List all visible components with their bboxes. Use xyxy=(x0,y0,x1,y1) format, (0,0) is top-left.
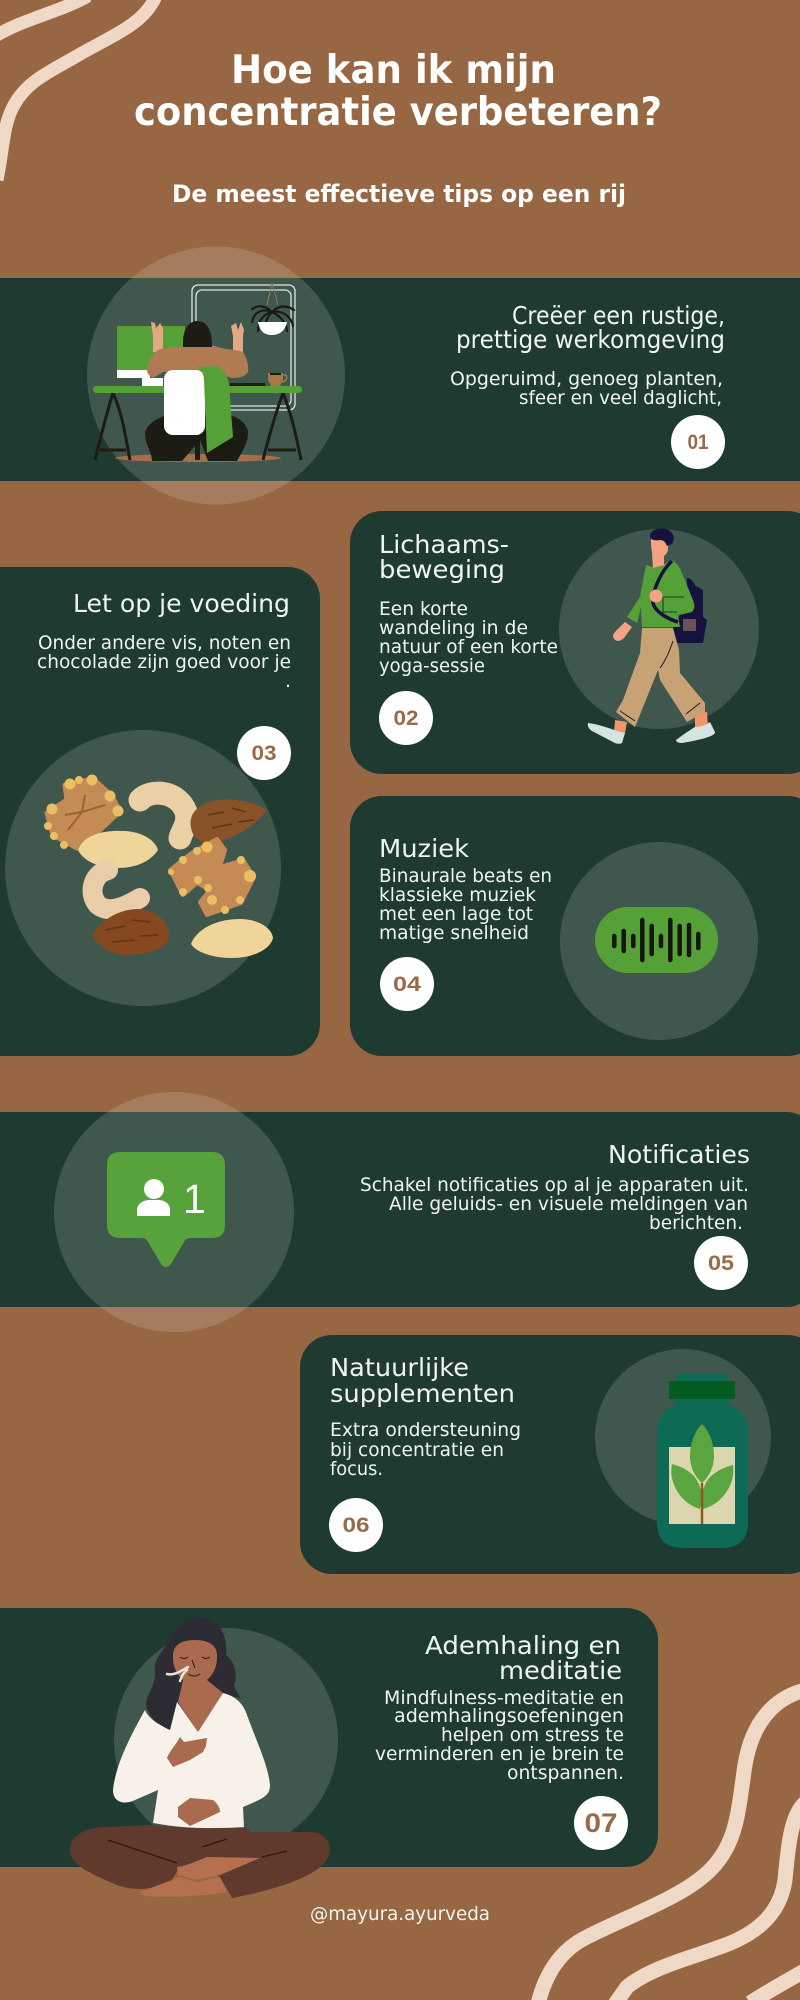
body text xyxy=(379,598,558,677)
number badge 01 xyxy=(671,415,725,469)
heading: supplementen xyxy=(330,1379,515,1408)
icon: notification bubble xyxy=(107,1152,225,1267)
body text xyxy=(450,368,723,409)
body text: Alle geluids- en visuele meldingen van xyxy=(389,1193,748,1215)
heading: Let op je voeding xyxy=(73,589,290,618)
number badge 01: 01 xyxy=(688,431,709,454)
panel: 05 notificaties xyxy=(0,1092,800,1332)
icon: walking man xyxy=(588,529,715,744)
number badge 05: 05 xyxy=(708,1252,734,1275)
number badge 02: 02 xyxy=(394,707,418,730)
body text: klassieke muziek xyxy=(379,884,536,906)
icon: supplement bottle xyxy=(657,1373,748,1548)
icon: mixed nuts xyxy=(44,774,273,958)
icon: sound wave pill xyxy=(595,907,718,973)
body text: natuur of een korte xyxy=(379,636,558,658)
number badge 04: 04 xyxy=(393,973,421,996)
decorative waves bottom right xyxy=(538,1690,800,2000)
heading xyxy=(330,1353,515,1408)
body text xyxy=(360,1174,749,1234)
body text: met een lage tot xyxy=(379,903,533,925)
body text: ontspannen. xyxy=(507,1762,624,1784)
heading: Lichaams- xyxy=(379,530,509,559)
heading: beweging xyxy=(379,555,505,584)
title: concentratie verbeteren? xyxy=(134,90,662,135)
body text: ademhalingsoefeningen xyxy=(394,1705,624,1727)
panel: 03 voeding xyxy=(0,567,320,1056)
number badge 06: 06 xyxy=(342,1514,370,1537)
panel: 04 muziek xyxy=(350,796,800,1056)
body text: berichten. xyxy=(649,1212,743,1234)
icon: person at desk xyxy=(93,283,302,462)
heading: Natuurlijke xyxy=(330,1353,469,1382)
body text: Mindfulness-meditatie en xyxy=(384,1687,624,1709)
number badge 02 xyxy=(379,691,433,745)
number badge 07 xyxy=(574,1796,628,1850)
number badge 05 xyxy=(694,1236,748,1290)
heading: meditatie xyxy=(499,1656,622,1685)
number badge 03 xyxy=(237,726,291,780)
body text: Schakel notificaties op al je apparaten uit. xyxy=(360,1174,749,1196)
body text: . xyxy=(285,670,291,692)
body text xyxy=(330,1419,521,1480)
subtitle: De meest effectieve tips op een rij xyxy=(172,180,626,208)
number badge 07: 07 xyxy=(584,1808,618,1838)
body text: Binaurale beats en xyxy=(379,865,552,887)
decorative waves top left xyxy=(0,0,156,180)
heading xyxy=(379,530,509,584)
body text: focus. xyxy=(330,1458,383,1480)
heading: Creëer een rustige, xyxy=(512,301,725,330)
body text: sfeer en veel daglicht, xyxy=(519,387,722,409)
icon: notification bubble: 1 xyxy=(183,1176,206,1222)
body text: matige snelheid xyxy=(379,922,529,944)
body text: Extra ondersteuning xyxy=(330,1419,521,1441)
heading: Notificaties xyxy=(608,1140,750,1169)
body text: Een korte xyxy=(379,598,468,620)
title xyxy=(134,48,662,135)
heading xyxy=(425,1631,622,1685)
body text: verminderen en je brein te xyxy=(375,1743,624,1765)
heading: Ademhaling en xyxy=(425,1631,621,1660)
body text: wandeling in de xyxy=(379,617,528,639)
heading: prettige werkomgeving xyxy=(456,325,725,354)
body text: yoga-sessie xyxy=(379,655,485,677)
number badge 03: 03 xyxy=(252,742,276,765)
icon: meditating woman xyxy=(70,1617,330,1898)
footer handle: @mayura.ayurveda xyxy=(310,1903,490,1925)
body text: Onder andere vis, noten en xyxy=(38,632,291,654)
body text xyxy=(375,1687,624,1784)
body text xyxy=(37,632,291,692)
number badge 04 xyxy=(380,957,434,1011)
panel: 06 supplementen xyxy=(300,1335,800,1574)
panel: 02 lichaamsbeweging xyxy=(350,511,800,774)
panel: 07 ademhaling xyxy=(0,1608,658,1898)
body text: chocolade zijn goed voor je xyxy=(37,651,291,673)
body text: Opgeruimd, genoeg planten, xyxy=(450,368,723,390)
body text: helpen om stress te xyxy=(441,1724,624,1746)
heading xyxy=(456,301,725,354)
panel: 01 werkomgeving xyxy=(0,246,800,504)
number badge 06 xyxy=(329,1498,383,1552)
body text xyxy=(379,865,552,944)
heading: Muziek xyxy=(379,834,470,863)
body text: bij concentratie en xyxy=(330,1439,504,1461)
title: Hoe kan ik mijn xyxy=(231,48,556,93)
